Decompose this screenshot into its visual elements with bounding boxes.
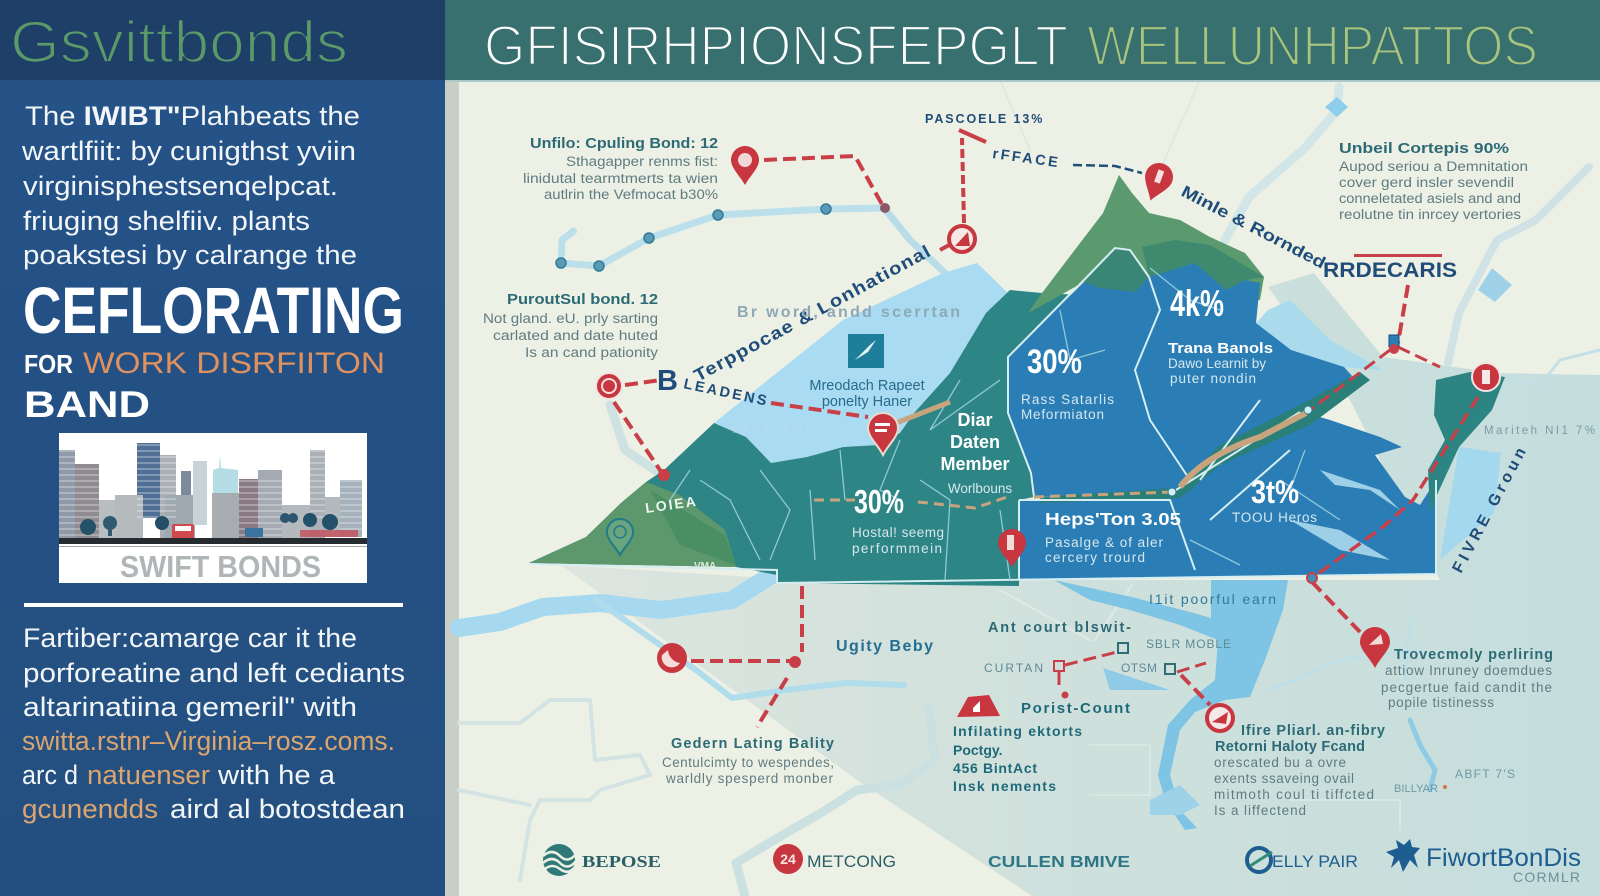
callout: river: Retorni Haloty Fcand — [1215, 739, 1365, 755]
text: lake note: ponelty Haner — [822, 394, 912, 410]
pin: center — [868, 413, 898, 455]
faded lake label: PROTEAIIY — [733, 425, 811, 436]
callout: river: Ifire Pliarl. an-fibry — [1241, 723, 1385, 739]
callout: river: Is a liffectend — [1214, 803, 1306, 818]
stat: 30 teal: performmein — [852, 541, 942, 556]
callout: pursuit bond: carlated and date huted — [493, 328, 658, 343]
callout: pursuit bond — [483, 292, 658, 360]
logo: Elly Pair: ELLY PAIR — [1272, 852, 1358, 871]
label: decaris: RRDECARIS — [1323, 259, 1457, 282]
lower labels: CURTAN — [984, 661, 1043, 675]
stat: Heps'Ton: Pasalge & of aler — [1045, 535, 1164, 550]
pin: river circle — [1207, 705, 1233, 731]
lower labels: SBLR MOBLE — [1146, 637, 1231, 651]
logo: Fiwort Bonds: FiwortBonDis — [1426, 844, 1581, 872]
logo: Metcong: METCONG — [807, 852, 896, 871]
callout: top right: conneletated asiels and and — [1339, 191, 1521, 206]
title bar — [445, 0, 1600, 82]
callout: river: orescated bu a ovre — [1214, 755, 1346, 770]
label: surface: rFFACE — [991, 146, 1061, 171]
lower labels: Ugity Beby — [836, 638, 933, 655]
region: green north — [1028, 175, 1264, 313]
pin: southwest circle — [657, 643, 687, 673]
callout: top left: autlrin the Vefmocat b30% — [544, 187, 718, 202]
red rule — [1354, 254, 1442, 257]
intro text: poakstesi by calrange the — [23, 240, 357, 270]
main heading: CEFLORATING — [23, 273, 404, 347]
callout: lower right: pecgertue faid candit the — [1381, 680, 1552, 695]
callout: river — [1214, 723, 1385, 818]
card label: SWIFT BONDS — [120, 549, 321, 584]
rotated label: group: FIVRE Groun — [1450, 444, 1530, 576]
callout: top left: linidutal tearmtmerts ta wien — [523, 171, 718, 186]
callout: port count: 456 BintAct — [953, 760, 1037, 776]
region: green southwest — [529, 482, 736, 567]
small labels — [1394, 767, 1515, 795]
stat: Diar Daten Member — [940, 410, 1012, 496]
callout: pursuit bond: Is an cand pationity — [525, 345, 658, 360]
footer logos — [543, 839, 1581, 885]
lower labels: Ant court blswit- — [988, 620, 1131, 636]
rotated label: minle: Minle & Rornded — [1178, 183, 1328, 272]
title text right: WELLUNHPATTOS — [1087, 14, 1538, 78]
stat: 4k — [1168, 283, 1273, 386]
callout: top right: Unbeil Cortepis 90% — [1339, 141, 1509, 157]
logo: Bepose — [543, 844, 661, 876]
region: eastern shore — [1428, 372, 1505, 513]
tan road — [814, 402, 1306, 508]
label: B Leadens — [657, 365, 770, 410]
skyline image card — [59, 433, 367, 584]
callout: port count: Insk nements — [953, 778, 1056, 794]
intro text: friuging shelfiiv. plants — [23, 206, 310, 236]
callout: top left: Sthagapper renms fist: — [566, 154, 718, 169]
logo: Fiwort Bonds — [1386, 839, 1581, 885]
dashed red leader lines — [614, 130, 1478, 727]
pin: north circle — [949, 226, 975, 252]
callout: lower right: Trovecmoly perliring — [1394, 647, 1553, 663]
callout: lower left — [662, 736, 834, 786]
small labels: BILLYAR — [1394, 783, 1438, 795]
label: small coastal: VMA — [694, 561, 716, 572]
pin: left circle — [596, 373, 622, 399]
main heading: WORK DISRFIITON — [83, 347, 385, 380]
main heading: BAND — [24, 384, 150, 425]
region: teal central — [529, 290, 1180, 586]
stat: 30 teal: Hostal! seemg — [852, 525, 944, 540]
stat: 4k: puter nondin — [1170, 371, 1256, 386]
icon: teal square — [848, 334, 884, 368]
callout: top left: Unfilo: Cpuling Bond: 12 — [530, 136, 718, 152]
logo: Metcong: 24 — [780, 851, 796, 867]
logo: Fiwort Bonds: CORMLR — [1513, 869, 1580, 885]
stat: 4k: Dawo Learnit by — [1168, 356, 1266, 371]
stat: 3t: 3t% — [1251, 474, 1299, 510]
region borders — [529, 248, 1436, 583]
callout: top left — [523, 136, 718, 202]
text: lake note — [809, 378, 925, 410]
main heading: FOR — [24, 349, 73, 379]
stat: 3.0 west blue — [1021, 343, 1114, 422]
lower text: natuenser — [87, 760, 210, 790]
stat: Diar Daten Member: Worlbouns — [948, 481, 1012, 496]
stat: Diar Daten Member: Diar — [957, 410, 993, 430]
lower labels: OTSM — [1121, 661, 1157, 675]
stat: 3.0 west blue: Rass Satarlis — [1021, 392, 1114, 407]
text: lake note: Mreodach Rapeet — [809, 378, 925, 394]
brand logo: Gsvittbonds — [10, 10, 348, 75]
callout: lower left: Gedern Lating Bality — [671, 736, 834, 752]
pin: south central — [998, 529, 1026, 567]
rotated label: national: Terppocae & Lonhational — [690, 241, 935, 386]
stat: 3.0 west blue: 30% — [1027, 343, 1082, 381]
stat: 3t — [1232, 474, 1317, 525]
lower text: gcunendds — [22, 794, 158, 824]
stat: 3.0 west blue: Meformiaton — [1021, 407, 1104, 422]
callout: pursuit bond: Not gland. eU. prly sarting — [483, 311, 658, 326]
icon: triangle marker — [957, 695, 1000, 717]
lower text: altarinatiina gemeril" with — [23, 692, 357, 722]
label: B Leadens: LEADENS — [682, 376, 770, 410]
stat: Diar Daten Member: Member — [940, 454, 1010, 474]
intro text: The IWIBT" Plahbeats the — [25, 101, 360, 131]
callout: port count: Poctgy. — [953, 742, 1003, 758]
divider — [24, 603, 403, 607]
callout: top right: Aupod seriou a Demnitation — [1339, 159, 1528, 174]
intro text: wartlfiit: by cunigthst yviin — [21, 136, 356, 166]
label: green region: LOIEA — [644, 493, 699, 516]
callout: lower right — [1381, 647, 1553, 710]
pin: southeast — [1360, 627, 1390, 668]
small labels: ABFT 7'S — [1455, 767, 1515, 781]
callout: port count: Infilating ektorts — [953, 723, 1082, 739]
callout: lower right: popile tistinesss — [1388, 695, 1494, 710]
dashed navy line — [1073, 165, 1142, 173]
route markers — [556, 203, 1447, 789]
stat: 4k: Trana Banols — [1168, 341, 1273, 357]
region: darker green band — [1142, 240, 1264, 290]
callout: pursuit bond: PuroutSul bond. 12 — [507, 292, 658, 308]
callout: top right: reolutne tin inrcey vertories — [1339, 207, 1521, 222]
water bodies — [714, 97, 1512, 830]
logo: Metcong — [773, 844, 896, 874]
callout: top right: cover gerd insler sevendil — [1339, 175, 1514, 190]
callout: river: exents ssaveing ovail — [1214, 771, 1354, 786]
main heading — [23, 273, 404, 425]
map background — [445, 0, 1600, 896]
logo: Elly Pair — [1247, 848, 1358, 872]
logo: Cullen: CULLEN BMIVE — [988, 854, 1130, 871]
logo: Bepose: BEPOSE — [582, 852, 661, 871]
lower text: arc d — [22, 760, 78, 790]
callout: lower right: attiow Inruney doemdues — [1385, 663, 1552, 678]
lower text: with he a — [217, 760, 336, 790]
region: blue north — [1008, 263, 1352, 497]
stat: Diar Daten Member: Daten — [950, 432, 1000, 452]
callout: lower left: Centulcimty to wespendes, — [662, 755, 834, 770]
pale rivers on map — [459, 80, 1600, 896]
title text left: GFISIRHPIONSFEPGLT — [484, 14, 1068, 78]
lower labels: I1it poorful earn — [1149, 591, 1276, 607]
callout: port count: Porist-Count — [1021, 700, 1130, 717]
intro text — [21, 101, 360, 270]
callout: port count — [953, 700, 1130, 794]
label: top center: PASCOELE 13% — [925, 112, 1043, 126]
stat: 30 teal — [852, 483, 944, 556]
lower text: porforeatine and left cediants — [23, 658, 405, 688]
lower text: Fartiber:camarge car it the — [23, 623, 357, 653]
state map — [529, 175, 1505, 586]
region: arch of dark teal green — [1084, 248, 1149, 292]
pin: east circle — [1472, 363, 1500, 391]
pin: north peak — [1137, 159, 1177, 205]
callout: top right — [1339, 141, 1528, 222]
stat: Heps'Ton: cercery trourd — [1045, 550, 1145, 565]
stat: Heps'Ton: Heps'Ton 3.05 — [1045, 509, 1181, 529]
stat: 3t: TOOU Heros — [1232, 510, 1317, 525]
faded label: Br word, andd scerrtan — [737, 304, 960, 321]
stat: 30 teal: 30% — [854, 483, 904, 520]
pin: top left callout — [731, 146, 759, 185]
region: blue southeast — [1019, 413, 1436, 580]
lower text: switta.rstnr–Virginia–rosz.coms. — [22, 726, 395, 756]
label: east margin: Mariteh NI1 7% — [1484, 425, 1595, 437]
stat: 4k: 4k% — [1170, 283, 1224, 324]
stat: Heps'Ton — [1045, 509, 1181, 565]
road band — [1040, 372, 1370, 503]
callout: river: mitmoth coul ti tiffcted — [1214, 787, 1374, 802]
lower text — [22, 623, 405, 824]
lower text: aird al botostdean — [170, 794, 405, 824]
left panel — [0, 0, 445, 896]
intro text: virginisphestsenqelpcat. — [23, 171, 338, 201]
callout: lower left: warldly spesperd monber — [665, 771, 834, 786]
lower labels — [836, 591, 1276, 675]
label: B Leadens: B — [657, 365, 678, 397]
pin: outlined green — [607, 519, 633, 555]
